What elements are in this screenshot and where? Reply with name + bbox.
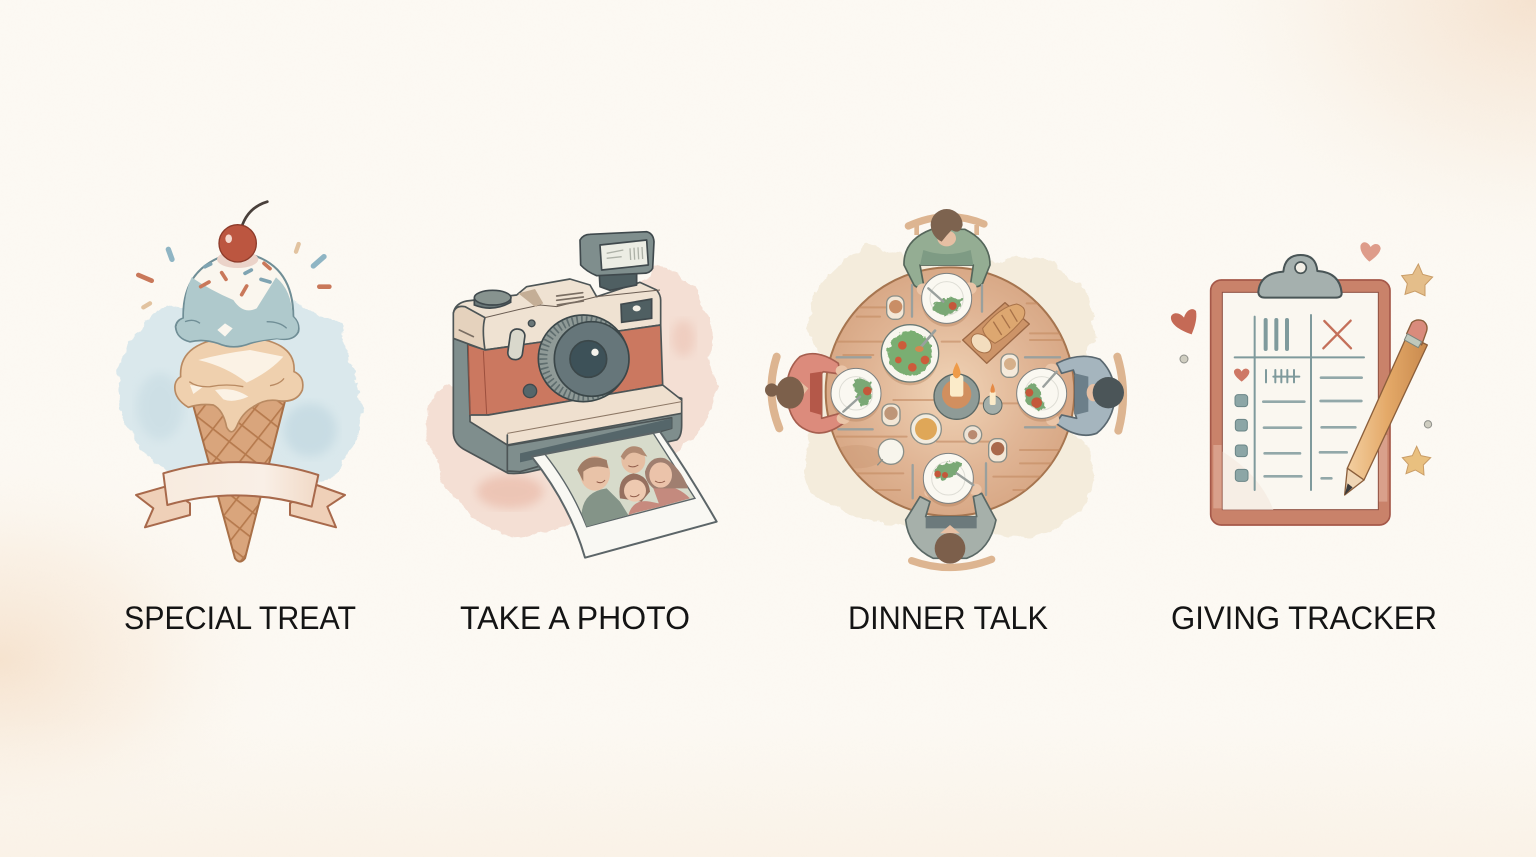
label: giving tracker: GIVING TRACKER xyxy=(1171,600,1437,636)
icon: instant camera with printed photo xyxy=(425,232,717,558)
icon: family at round table from above xyxy=(765,209,1124,568)
person: left, red xyxy=(765,354,850,433)
hearts, stars and dots xyxy=(1171,242,1433,475)
panel: giving tracker xyxy=(1171,242,1437,636)
flash xyxy=(580,232,654,290)
panel: take a photo xyxy=(425,232,717,636)
salad bowl xyxy=(881,325,939,385)
dial xyxy=(474,290,511,308)
ribbon banner xyxy=(136,462,345,527)
panel: special treat xyxy=(118,202,362,636)
cherry xyxy=(219,202,267,262)
candles xyxy=(934,362,1002,419)
printed photo xyxy=(532,432,717,558)
lens xyxy=(538,315,629,402)
person: top, green xyxy=(904,209,990,295)
tally grid xyxy=(1235,315,1364,490)
glasses and small dishes xyxy=(877,296,1018,465)
person: bottom, grey xyxy=(906,484,996,568)
clip xyxy=(1258,255,1342,298)
bread board xyxy=(963,303,1029,363)
panel: dinner talk xyxy=(765,209,1124,636)
sprinkles xyxy=(138,244,329,307)
person: right, blue grey xyxy=(1045,356,1124,435)
checkboxes xyxy=(1235,395,1248,481)
label: dinner talk: DINNER TALK xyxy=(848,600,1048,636)
icon: clipboard tally sheet with pencil xyxy=(1171,242,1433,525)
plates and cutlery xyxy=(831,273,1067,507)
viewfinder xyxy=(621,299,652,322)
icon: ice cream cone with ribbon xyxy=(118,202,362,562)
label: special treat: SPECIAL TREAT xyxy=(124,600,356,636)
pencil xyxy=(1345,320,1427,495)
table xyxy=(826,267,1074,516)
label: take a photo: TAKE A PHOTO xyxy=(460,600,690,636)
camera body xyxy=(453,279,682,474)
